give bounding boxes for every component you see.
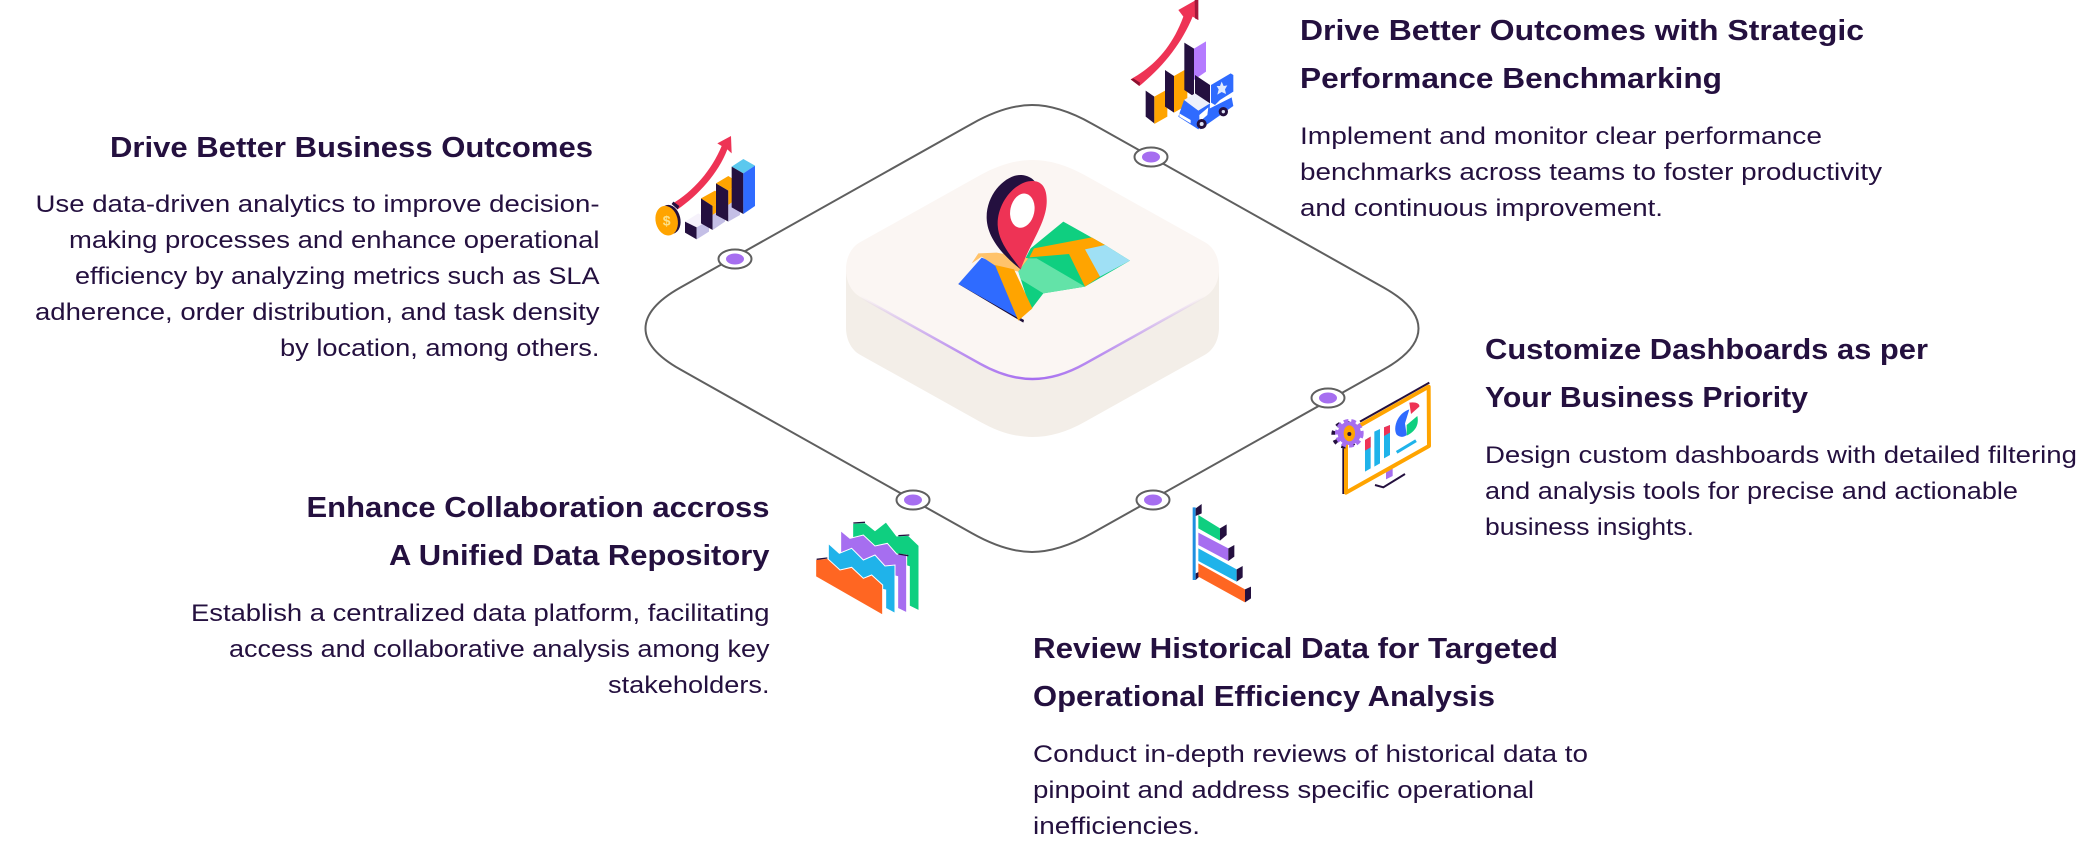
- text block: Enhance Collaboration: [191, 492, 770, 699]
- heading: Drive Better Business Outcomes: [110, 132, 593, 164]
- icon: stacked area layers: [816, 522, 919, 615]
- text block: Review Historical Data: [1033, 633, 1588, 840]
- body: benchmarks across teams to foster productivity: [1300, 159, 1882, 186]
- heading: Enhance Collaboration accross: [306, 492, 770, 524]
- body: Establish a centralized data platform, facilitating: [191, 600, 770, 627]
- body: adherence, order distribution, and task density: [35, 299, 600, 326]
- icon: horizontal bar stack: [1193, 504, 1251, 602]
- body: and analysis tools for precise and actionable: [1485, 478, 2018, 505]
- body: business insights.: [1485, 514, 1694, 541]
- body: Design custom dashboards with detailed filtering: [1485, 442, 2077, 469]
- body: [35, 191, 600, 362]
- body: Use data-driven analytics to improve decision-: [36, 191, 600, 218]
- icon: bars, arrow and delivery truck: [1131, 0, 1233, 129]
- truck: [1178, 93, 1233, 129]
- heading: Operational Efficiency Analysis: [1033, 681, 1495, 713]
- body: access and collaborative analysis among key: [229, 636, 770, 663]
- heading: [306, 492, 770, 572]
- body: and continuous improvement.: [1300, 195, 1663, 222]
- icon: dashboard monitor with gear: [1333, 383, 1429, 494]
- body: [191, 600, 770, 699]
- heading: A Unified Data Repository: [389, 540, 770, 572]
- coin dollar sign: $: [663, 213, 671, 229]
- heading: Your Business Priority: [1485, 382, 1808, 414]
- heading: [1485, 334, 1928, 414]
- platform top face: [846, 160, 1219, 379]
- heading: Performance Benchmarking: [1300, 63, 1722, 95]
- star: [1217, 82, 1227, 95]
- heading: [1300, 15, 1864, 95]
- heading: [1033, 633, 1558, 713]
- body: making processes and enhance operational: [69, 227, 600, 254]
- platform side: [846, 270, 1219, 437]
- body: [1485, 442, 2077, 541]
- body: Conduct in-depth reviews of historical data to: [1033, 741, 1588, 768]
- icon: folded map with location pin: [958, 175, 1130, 323]
- text block: Strategic Performance Benchmarking: [1300, 15, 1882, 222]
- body: by location, among others.: [280, 335, 600, 362]
- body: stakeholders.: [608, 672, 770, 699]
- text block: Customize Dashboards: [1485, 334, 2077, 541]
- central platform: [846, 160, 1219, 437]
- rounded diamond loop connector: [646, 105, 1418, 552]
- location pin: [987, 175, 1047, 269]
- body: [1300, 123, 1882, 222]
- body: inefficiencies.: [1033, 813, 1200, 840]
- body: efficiency by analyzing metrics such as SLA: [75, 263, 600, 290]
- heading: Review Historical Data for Targeted: [1033, 633, 1558, 665]
- body: [1033, 741, 1588, 840]
- gear: [1333, 421, 1362, 447]
- body: pinpoint and address specific operational: [1033, 777, 1534, 804]
- heading: Drive Better Outcomes with Strategic: [1300, 15, 1864, 47]
- heading: Customize Dashboards as per: [1485, 334, 1928, 366]
- connector nodes: [718, 148, 1344, 510]
- icon: coin, growth bars and arrow: [652, 136, 755, 239]
- platform purple edge: [860, 297, 1205, 379]
- text block: Drive Better Business Outcomes: [35, 132, 600, 362]
- body: Implement and monitor clear performance: [1300, 123, 1822, 150]
